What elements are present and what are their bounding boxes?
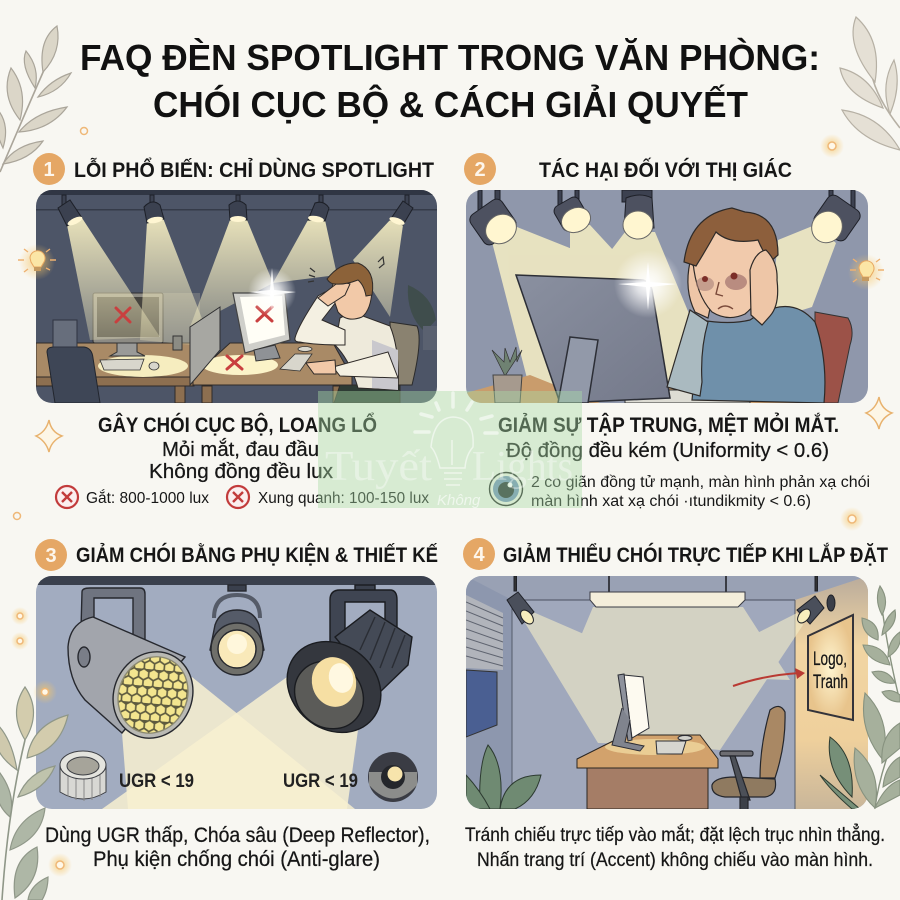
glare flare [248, 268, 296, 316]
panel 4: installation [463, 538, 900, 871]
left chair [47, 347, 100, 403]
plant [408, 285, 436, 332]
caption 3: Phụ kiện chống chói (Anti-glare) [93, 848, 380, 871]
wall art: logo, picture: Tranh [813, 672, 848, 693]
red crosses [116, 307, 272, 369]
desk [466, 375, 600, 403]
right spotlight [795, 576, 835, 625]
light beams [525, 607, 803, 750]
illustration: anti-glare spotlights [36, 576, 437, 809]
title [80, 36, 820, 125]
UGR labels: UGR < 19 [283, 771, 358, 792]
middle spotlight [210, 585, 264, 675]
spotlights [467, 190, 863, 250]
reflector accessory [368, 752, 418, 802]
watermark bulb [415, 393, 497, 485]
icon: eye [490, 472, 522, 506]
left honeycomb spotlight [67, 587, 194, 739]
watermark: Không [437, 492, 481, 509]
number badge 4: 4 [473, 544, 485, 566]
illustration: tired worker at monitor [466, 190, 868, 403]
wall art: logo, picture [808, 615, 853, 720]
number badge 2: 2 [474, 159, 486, 181]
watermark: Tuyết [325, 444, 432, 490]
number badge 1 [33, 153, 65, 185]
icon: light bulb left [18, 244, 56, 280]
illustration: office with spotlights [36, 190, 437, 403]
caption 2: GIẢM SỰ TẬP TRUNG, MỆT MỎI MẮT. [498, 413, 839, 437]
pain marks [308, 257, 384, 282]
office worker [295, 263, 400, 403]
honeycomb accessory [60, 751, 106, 801]
number badge 4 [463, 538, 495, 570]
track [36, 576, 437, 585]
caption 1: GÂY CHÓI CỤC BỘ, LOANG LỔ [98, 413, 377, 437]
stat: harsh lux: Gắt: 800-1000 lux [86, 490, 209, 507]
pen holder [173, 336, 182, 350]
panel 3: accessories and design [35, 539, 438, 871]
number badge 3: 3 [45, 545, 57, 567]
number badge 3 [35, 539, 67, 571]
floor plant left [466, 745, 541, 809]
watermark: Lights [472, 444, 573, 490]
decorative leaves: top left [0, 26, 71, 172]
title: FAQ ĐÈN SPOTLIGHT TRONG VĂN PHÒNG: [80, 36, 820, 78]
office chair [390, 322, 419, 385]
window blinds [466, 595, 503, 737]
detail text [531, 474, 870, 510]
stat: surrounding lux: Xung quanh: 100-150 lux [258, 490, 429, 507]
caption 3: Dùng UGR thấp, Chóa sâu (Deep Reflector), [45, 824, 430, 847]
wall art: logo, picture: Logo, [813, 649, 847, 670]
monitor back [516, 275, 670, 403]
heading 2: TÁC HẠI ĐỐI VỚI THỊ GIÁC [539, 158, 792, 182]
chair [815, 312, 852, 403]
desks [36, 343, 352, 403]
right monitor [233, 293, 290, 361]
keyboard [625, 390, 750, 403]
caption 2 [498, 413, 839, 462]
decorative leaves: right [854, 586, 900, 808]
track spotlights [58, 195, 413, 226]
desk [577, 735, 718, 809]
light beams [492, 225, 836, 398]
illustration: room with offset lighting [466, 576, 868, 811]
beams [67, 218, 403, 347]
partition [190, 307, 220, 385]
panel 2: effects on vision [464, 153, 870, 510]
keyboards and mouse [100, 346, 312, 371]
UGR labels: UGR < 19 [119, 771, 194, 792]
number badge 2 [464, 153, 496, 185]
decorative leaves: bottom left [0, 687, 68, 900]
title: CHÓI CỤC BỘ & CÁCH GIẢI QUYẾT [153, 83, 748, 125]
caption 1: Mỏi mắt, đau đầu [162, 438, 319, 461]
decorative leaves: top right [840, 17, 900, 150]
glowing dots [11, 128, 864, 877]
office chair [712, 706, 785, 811]
heading 1: LỖI PHỔ BIẾN: CHỈ DÙNG SPOTLIGHT [74, 158, 434, 182]
right deep reflector spotlight [286, 584, 413, 734]
panel 1: common mistake [33, 153, 437, 508]
icon: sparkle left [36, 420, 62, 452]
icon: light bulb right [848, 254, 884, 290]
detail text: 2 co giãn đồng tử mạnh, màn hình phản xạ chói [531, 474, 870, 491]
stat: surrounding lux [227, 486, 429, 508]
heading 3: GIẢM CHÓI BẰNG PHỤ KIỆN & THIẾT KẾ [76, 543, 438, 567]
computer monitor [612, 674, 692, 754]
glare on monitor [616, 254, 680, 316]
UGR labels [119, 771, 358, 792]
number badge 1: 1 [43, 159, 55, 181]
books [53, 320, 77, 347]
light beams [122, 677, 355, 809]
caption 3 [45, 824, 430, 871]
ceiling light [590, 576, 745, 607]
plant [492, 347, 522, 403]
red arrow [733, 668, 805, 686]
caption 1 [98, 413, 377, 483]
caption 4 [465, 822, 885, 871]
caption 2: Độ đồng đều kém (Uniformity < 0.6) [506, 440, 829, 462]
watermark [318, 391, 582, 509]
stat: harsh lux [56, 486, 209, 508]
tired eyes [696, 272, 747, 309]
light pools [98, 355, 188, 377]
detail text: màn hình xat xạ chói ·ıtundikmity < 0.6) [531, 493, 811, 510]
left monitor [93, 293, 163, 356]
person [667, 208, 825, 403]
left spotlight [507, 576, 536, 626]
floor plant right [820, 737, 860, 809]
icon: sparkle right [866, 397, 892, 429]
caption 1: Không đồng đều lux [149, 461, 333, 483]
